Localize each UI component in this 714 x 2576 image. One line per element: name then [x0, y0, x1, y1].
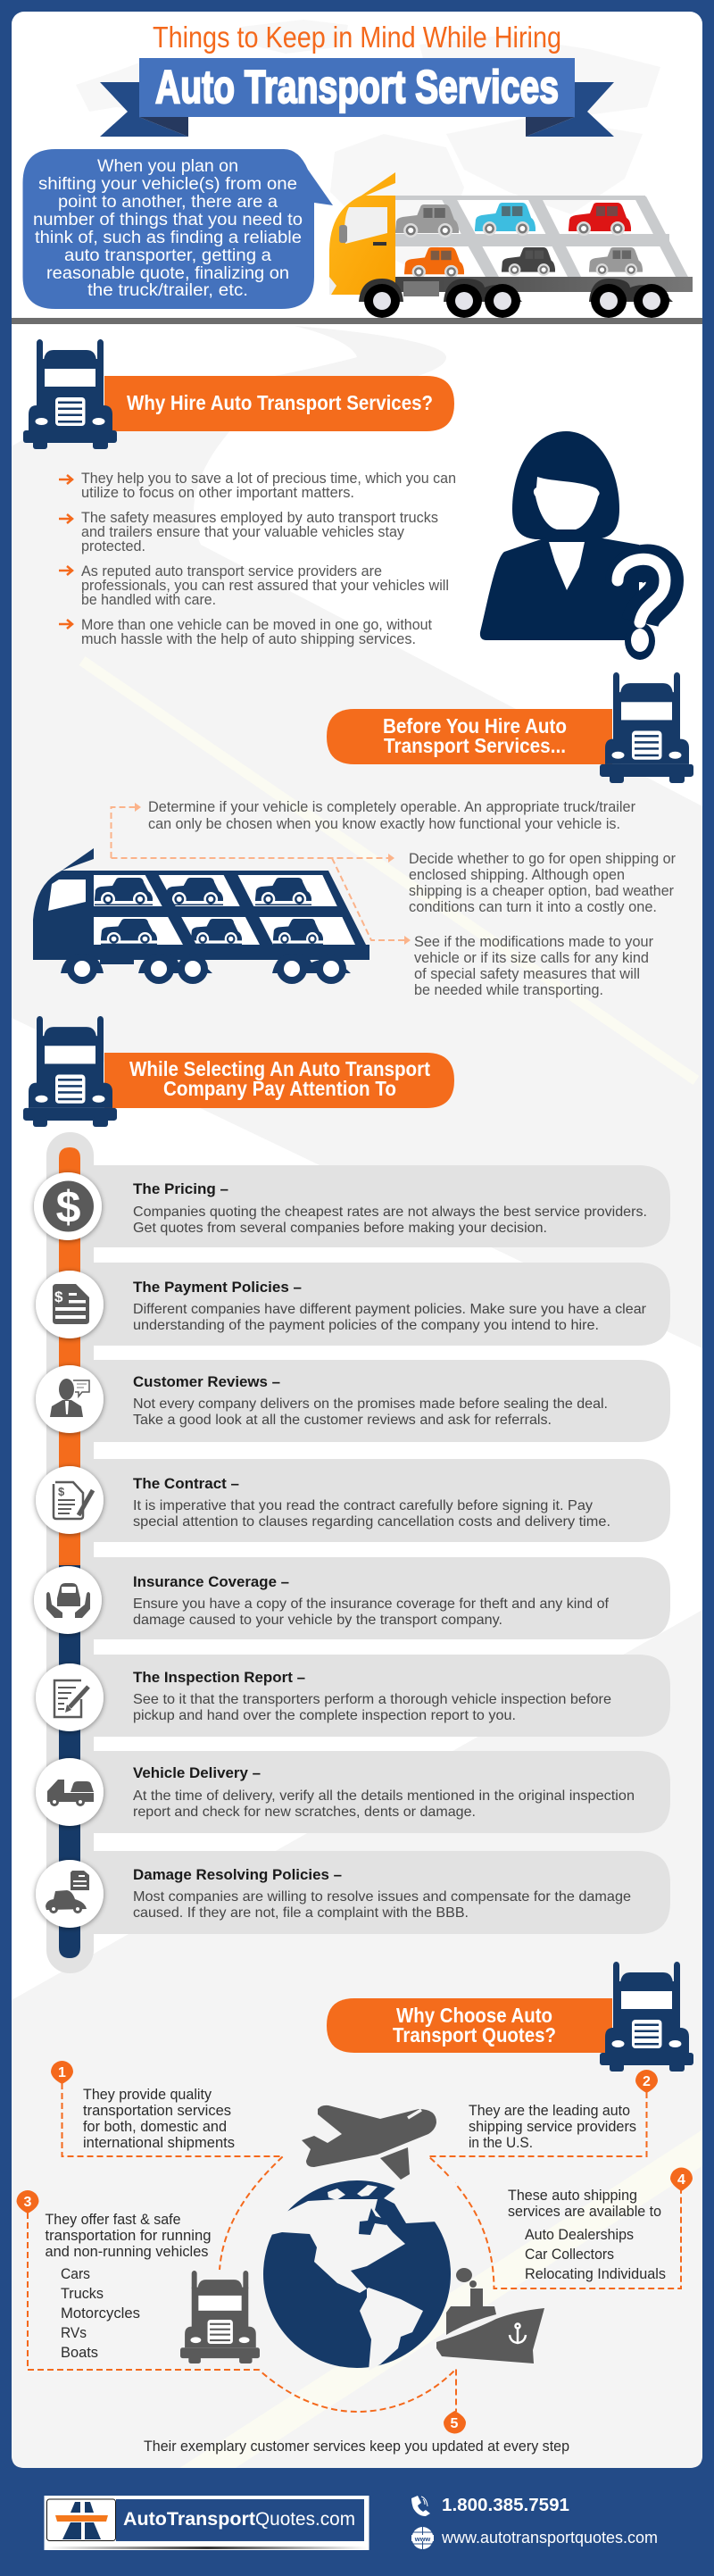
heading: while selecting: While Selecting An Auto Transport [129, 1057, 430, 1080]
card text: damage resolving: Damage Resolving Policies – [133, 1866, 342, 1883]
heading: while selecting: Company Pay Attention To [163, 1077, 396, 1100]
reason text: As reputed auto transport service providers are [81, 563, 382, 579]
before-you-hire text [148, 798, 676, 998]
card text: customer reviews [133, 1373, 608, 1428]
card text: insurance coverage: Insurance Coverage – [133, 1573, 289, 1590]
heading pill: while selecting [104, 1053, 454, 1108]
intro text: auto transporter, getting a [64, 246, 271, 265]
circle icon: dollar [34, 1172, 102, 1240]
circle icon: contract: $ [58, 1485, 65, 1498]
intro text [33, 157, 303, 300]
card text: the contract: special attention to clauses regarding cancellation costs and delivery time. [133, 1514, 610, 1530]
card text: the pricing [133, 1180, 647, 1236]
heading group: why choose [327, 1962, 693, 2072]
card text: damage resolving [133, 1866, 631, 1921]
card text: the contract: The Contract – [133, 1475, 239, 1492]
card text: vehicle delivery: Vehicle Delivery – [133, 1764, 261, 1781]
before-you-hire text: enclosed shipping. Although open [409, 867, 625, 883]
heading pill: why hire [104, 376, 454, 431]
card text: payment policies: The Payment Policies – [133, 1279, 302, 1296]
card: the contract [36, 1459, 670, 1542]
cars on rack [395, 203, 643, 279]
card text: the pricing: Companies quoting the cheapest rates are not always the best service providers. [133, 1205, 647, 1220]
car carrier truck illustration [329, 172, 693, 318]
heading pill: why choose [327, 1998, 612, 2053]
intro text: number of things that you need to [33, 211, 303, 229]
rack [395, 196, 689, 279]
reason 4 text: services are available to [508, 2203, 661, 2220]
reason text: much hassle with the help of auto shipping services. [81, 631, 416, 647]
road line [12, 318, 702, 324]
reason text: professionals, you can rest assured that your vehicles will [81, 578, 449, 594]
card: vehicle delivery [36, 1751, 670, 1833]
circle icon: payment document: $ [54, 1288, 63, 1305]
reason 3 text [45, 2211, 211, 2361]
reason text: The safety measures employed by auto transport trucks [81, 510, 438, 526]
reason 1 text: for both, domestic and [83, 2118, 227, 2135]
wheels [359, 279, 673, 318]
navy truck illustration [33, 848, 369, 984]
card text: customer reviews: Not every company delivers on the promises made before sealing the deal. [133, 1396, 608, 1412]
circle icon: car in hands [34, 1566, 102, 1634]
heading pill: before [327, 709, 612, 764]
card text: customer reviews: Customer Reviews – [133, 1373, 280, 1390]
title ribbon [100, 58, 614, 137]
reason 3 text: and non-running vehicles [45, 2243, 209, 2260]
circle icon: customer [36, 1365, 104, 1433]
reason 4 text: These auto shipping [508, 2187, 637, 2204]
logo wordmark: Quotes.com [255, 2509, 355, 2530]
truck icon: why hire [23, 339, 454, 449]
reason 1 text: transportation services [83, 2102, 231, 2119]
badge 5 [444, 2411, 466, 2434]
card: payment policies [36, 1263, 670, 1346]
intro text: reasonable quote, finalizing on [46, 264, 289, 283]
badge 3 [16, 2190, 39, 2213]
icon: woman with question mark [480, 431, 665, 660]
before-you-hire text: can only be chosen when you know exactly how functional your vehicle is. [148, 816, 620, 832]
circle icon: inspection form [36, 1663, 104, 1731]
card text: insurance coverage [133, 1573, 610, 1628]
reason 4 text: Car Collectors [525, 2246, 614, 2263]
logo highway mark [55, 2502, 108, 2539]
reason 2 text [469, 2102, 636, 2151]
ship anchor [510, 2323, 526, 2343]
logo wordmark [123, 2509, 355, 2530]
timeline track [46, 1132, 94, 1973]
heading: before: Before You Hire Auto [383, 714, 567, 738]
reason 1 text: They provide quality [83, 2086, 212, 2103]
phone number: 1.800.385.7591 [442, 2496, 569, 2515]
heading: why hire: Why Hire Auto Transport Services? [127, 391, 433, 414]
intro text: point to another, there are a [58, 193, 278, 212]
circle icon: contract [36, 1466, 104, 1534]
card: damage resolving [36, 1851, 670, 1934]
trailer base [373, 277, 693, 292]
badge 2: 2 [643, 2074, 651, 2089]
reason 4 text [508, 2187, 666, 2282]
heading: before: Transport Services... [384, 734, 566, 757]
reason 2 text: shipping service providers [469, 2118, 636, 2135]
before-you-hire text: conditions can turn it into a costly one. [409, 899, 657, 915]
footer logo [45, 2496, 369, 2550]
badge 1 [51, 2061, 73, 2084]
badge 4 [670, 2168, 693, 2191]
card text: insurance coverage: damage caused to your vehicle by the transport company. [133, 1613, 502, 1628]
before-you-hire text: Decide whether to go for open shipping or [409, 851, 676, 867]
card text: vehicle delivery [133, 1764, 635, 1820]
card text: insurance coverage: Ensure you have a copy of the insurance coverage for theft and any kind of [133, 1596, 610, 1612]
card text: inspection report [133, 1669, 611, 1723]
icon: ship [436, 2268, 544, 2363]
intro speech bubble [23, 149, 333, 309]
background streaks [82, 661, 714, 2487]
reason 3 text: RVs [61, 2324, 87, 2341]
dashed connectors: before section [111, 803, 411, 945]
ribbon heading: Auto Transport Services [155, 62, 559, 113]
reason text: protected. [81, 538, 145, 554]
card: inspection report [36, 1655, 670, 1737]
reason text: and trailers ensure that your valuable vehicles stay [81, 524, 405, 540]
icon: airplane [302, 2105, 436, 2180]
card: insurance coverage [34, 1557, 670, 1639]
card text: payment policies [133, 1279, 647, 1333]
reason text: More than one vehicle can be moved in one go, without [81, 617, 432, 633]
card text: payment policies: understanding of the payment policies of the company you intend to hire. [133, 1318, 599, 1333]
circle icon: tow truck [36, 1758, 104, 1826]
title line one: Things to Keep in Mind While Hiring [153, 21, 561, 54]
card text: the pricing: Get quotes from several companies before making your decision. [133, 1221, 547, 1236]
card: customer reviews [36, 1360, 670, 1442]
circle icon: dollar: $ [56, 1182, 81, 1232]
card text: inspection report: See to it that the transporters perform a thorough vehicle inspection before [133, 1692, 611, 1707]
before-you-hire text: See if the modifications made to your [414, 934, 653, 950]
heading: before [383, 714, 567, 757]
card text: vehicle delivery: At the time of delivery, verify all the details mentioned in the original inspection [133, 1788, 635, 1804]
reason 3 text: They offer fast & safe [45, 2211, 180, 2228]
badge 3: 3 [24, 2195, 32, 2210]
badge 1: 1 [58, 2065, 66, 2080]
intro text: think of, such as finding a reliable [35, 229, 302, 247]
card text: customer reviews: Take a good look at all the customer reviews and ask for referrals. [133, 1413, 552, 1428]
card text: the contract: It is imperative that you read the contract carefully before signing it. Pay [133, 1498, 593, 1513]
reason 1 text: international shipments [83, 2134, 235, 2151]
reason 3 text: Boats [61, 2344, 98, 2361]
reasons list [59, 471, 456, 647]
reason 3 text: Trucks [61, 2285, 104, 2302]
badge 5: 5 [451, 2416, 459, 2431]
reason 1 text [83, 2086, 235, 2151]
reason 4 text: Auto Dealerships [525, 2226, 634, 2243]
circle icon: payment document [36, 1271, 104, 1338]
logo wordmark: AutoTransport [123, 2509, 255, 2530]
reason arrows [59, 475, 72, 629]
before-you-hire text: shipping is a cheaper option, bad weather [409, 883, 674, 899]
dashed connectors: why choose [28, 2083, 681, 2412]
card text: damage resolving: caused. If they are not, file a complaint with the BBB. [133, 1905, 469, 1921]
white rack panes [94, 871, 362, 945]
reason text: utilize to focus on other important matters. [81, 485, 354, 501]
card text: payment policies: Different companies have different payment policies. Make sure you have a clear [133, 1302, 647, 1317]
reason text: They help you to save a lot of precious time, which you can [81, 471, 456, 487]
heading: while selecting [129, 1057, 430, 1100]
reason text [81, 471, 456, 647]
icon: phone [411, 2496, 430, 2516]
card text: vehicle delivery: report and check for new scratches, dents or damage. [133, 1805, 476, 1820]
reason 3 text: Motorcycles [61, 2305, 140, 2322]
icon: globe [263, 2170, 457, 2371]
circle icon: damaged car and document [36, 1860, 104, 1928]
card text: the contract [133, 1475, 610, 1530]
heading: why choose: Transport Quotes? [393, 2023, 556, 2047]
icon: www globe: www [414, 2535, 430, 2543]
before-you-hire text: vehicle or if its size calls for any kind [414, 950, 649, 966]
before-you-hire text: of special safety measures that will [414, 966, 640, 982]
website url: www.autotransportquotes.com [441, 2529, 658, 2547]
before-you-hire text: be needed while transporting. [414, 982, 603, 998]
background road band [12, 326, 702, 1348]
intro text: shifting your vehicle(s) from one [38, 175, 297, 194]
card text: inspection report: pickup and hand over the complete inspection report to you. [133, 1708, 516, 1723]
heading: why choose: Why Choose Auto [396, 2004, 552, 2027]
icon: grey truck [180, 2271, 260, 2363]
card text: damage resolving: Most companies are willing to resolve issues and compensate for the damage [133, 1889, 631, 1905]
background lower band [12, 1610, 702, 2468]
before-you-hire text: Determine if your vehicle is completely operable. An appropriate truck/trailer [148, 798, 635, 815]
card text: the pricing: The Pricing – [133, 1180, 228, 1197]
heading group: while selecting [23, 1016, 454, 1127]
card text: inspection report: The Inspection Report – [133, 1669, 305, 1686]
badge 4: 4 [677, 2172, 685, 2188]
reason 2 text: They are the leading auto [469, 2102, 630, 2119]
reason 3 text: Cars [61, 2265, 90, 2282]
heading group: before you hire [327, 672, 693, 783]
yellow cab [329, 172, 395, 295]
card: the pricing [34, 1165, 670, 1247]
badge 2 [635, 2070, 658, 2093]
navy cars [95, 878, 323, 946]
heading: why choose [393, 2004, 556, 2047]
reason 4 text: Relocating Individuals [525, 2265, 666, 2282]
intro text: the truck/trailer, etc. [87, 281, 248, 300]
intro text: When you plan on [97, 157, 238, 176]
reason text: be handled with care. [81, 592, 216, 608]
icon: www globe [411, 2527, 434, 2549]
reason 3 text: transportation for running [45, 2227, 211, 2244]
reason 2 text: in the U.S. [469, 2134, 533, 2151]
world map watermark [76, 20, 660, 268]
reason 5 text: Their exemplary customer services keep you updated at every step [144, 2438, 569, 2455]
